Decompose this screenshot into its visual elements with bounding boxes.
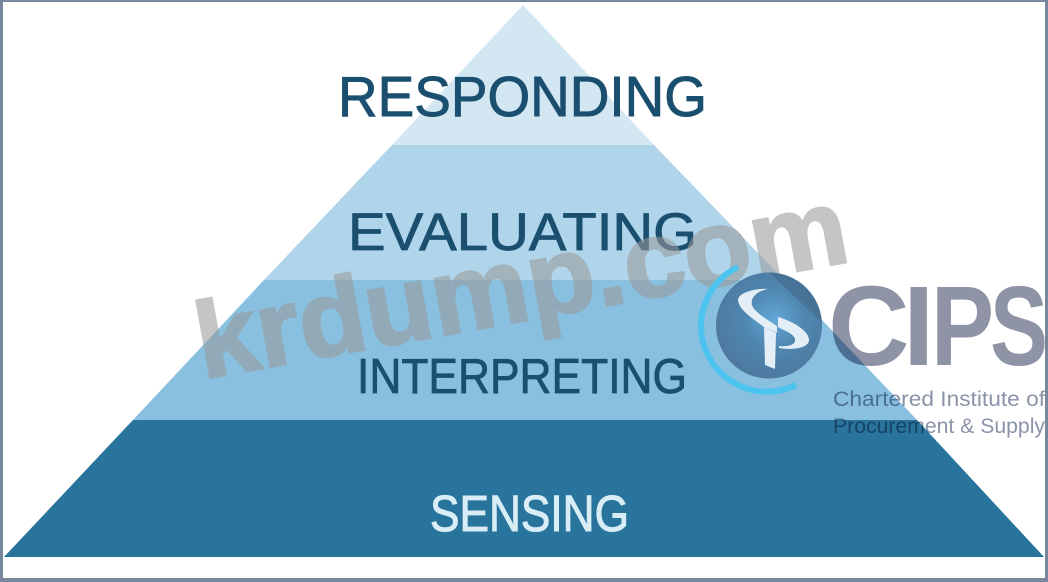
CIPS logo [701, 263, 1048, 438]
logo wordmark: P [931, 263, 994, 389]
pyramid tier: responding [392, 5, 654, 145]
pyramid tier: interpreting [133, 280, 917, 420]
label: responding: RESPONDING [338, 65, 707, 129]
logo orb [716, 272, 822, 378]
logo tagline line 2: Procurement & Supply [833, 415, 1045, 438]
label: evaluating: EVALUATING [348, 203, 697, 262]
label: interpreting: INTERPRETING [357, 350, 687, 404]
label: sensing: SENSING [430, 485, 629, 542]
logo wordmark: I [903, 263, 934, 389]
watermark: krdump.com [185, 165, 856, 402]
logo orb shaded edge [769, 272, 822, 322]
pyramid tier: sensing [4, 420, 1044, 557]
logo mark: S and P [738, 289, 809, 369]
logo ring [701, 267, 796, 392]
logo tagline line 1: Chartered Institute of [833, 388, 1045, 411]
logo wordmark [828, 263, 1048, 389]
logo wordmark: C [828, 263, 910, 389]
pyramid tier: evaluating [264, 145, 784, 280]
